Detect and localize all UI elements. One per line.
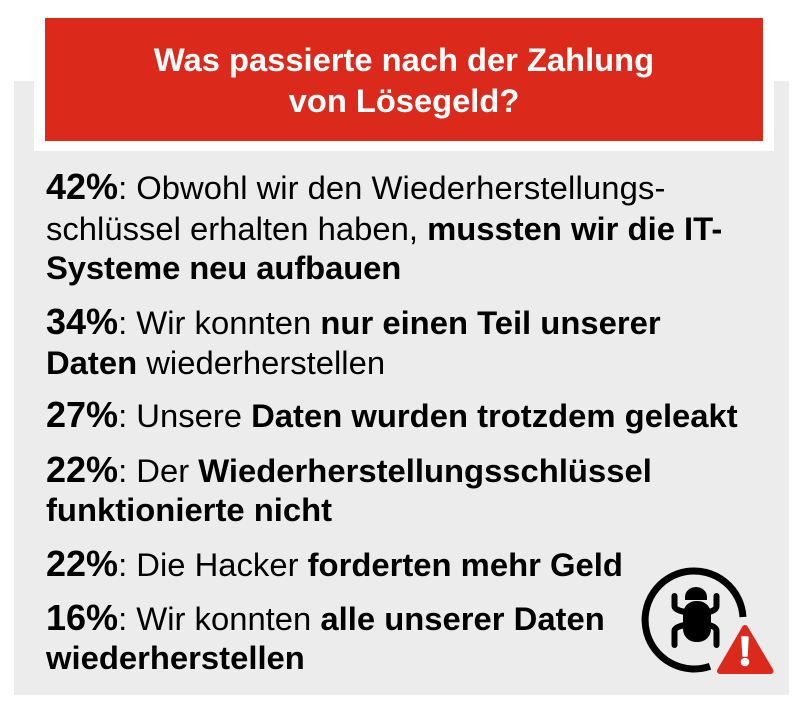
heading banner: Was passierte nach der Zahlung — [154, 41, 654, 78]
text block: 34% — [46, 301, 661, 381]
icon: warning triangle — [720, 628, 770, 671]
text block: 22% key: 22%: Der Wiederherstellungsschlüssel — [46, 449, 652, 490]
icon: circle ring — [645, 571, 743, 669]
icon: bug with warning triangle — [642, 568, 774, 674]
text block: 16% — [46, 597, 605, 676]
text block: 27%: 27%: Unsere Daten wurden trotzdem geleakt — [46, 394, 738, 435]
text block: 34%: 34%: Wir konnten nur einen Teil unserer — [46, 301, 661, 342]
text block: 16%: wiederherstellen — [46, 639, 305, 676]
text block: 42% — [46, 166, 722, 286]
text block: 42%: 42%: Obwohl wir den Wiederherstellungs- — [46, 166, 666, 207]
text block: 42%: Systeme neu aufbauen — [46, 249, 401, 286]
text block: 16%: 16%: Wir konnten alle unserer Daten — [46, 597, 605, 638]
text block: 22% money: 22%: Die Hacker forderten mehr Geld — [46, 543, 623, 584]
text block: 22% key: funktionierte nicht — [46, 491, 332, 528]
text block: 22% key — [46, 449, 652, 528]
text block: 34%: Daten wiederherstellen — [46, 344, 385, 381]
text block: 42%: schlüssel erhalten haben, mussten wir die IT- — [46, 210, 722, 247]
icon: bug — [674, 587, 716, 645]
heading banner: von Lösegeld? — [289, 82, 519, 119]
white frame behind heading — [34, 0, 774, 151]
heading banner — [45, 18, 763, 141]
